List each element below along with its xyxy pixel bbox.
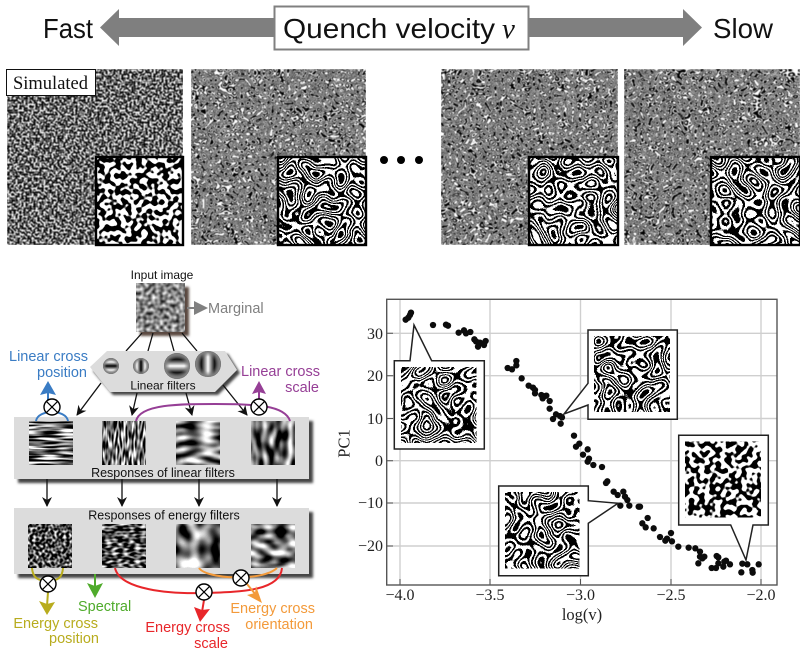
panel: responses of linear filters — [14, 417, 313, 483]
callout: slow pattern — [394, 325, 484, 449]
input image: Input image — [131, 268, 194, 282]
title symbol: ν — [502, 13, 515, 45]
x axis labels: −2.0 — [746, 587, 776, 604]
linear cross position: position — [37, 365, 87, 381]
arrows to linear responses — [77, 383, 247, 415]
pattern 3 — [441, 69, 618, 245]
marginal arrow and label: Marginal — [208, 301, 264, 317]
energy cross scale — [115, 568, 282, 652]
label: Slow: Slow — [713, 13, 774, 44]
panel: responses of energy filters — [14, 508, 313, 578]
x axis title: log(v) — [562, 605, 602, 624]
y axis labels: 0 — [375, 453, 383, 470]
energy cross orientation: Energy cross — [230, 601, 315, 617]
y axis title: PC1 — [334, 429, 354, 458]
energy cross position: Energy cross — [13, 616, 98, 632]
callout: fast pattern — [679, 435, 768, 560]
x axis labels: −3.5 — [475, 587, 505, 604]
ellipsis dots — [380, 156, 423, 164]
label: Fast: Fast — [43, 13, 93, 44]
chart: PC1 vs log(v) — [334, 299, 777, 624]
arrow: fast to slow — [100, 9, 702, 46]
energy cross orientation — [199, 568, 315, 633]
input image — [131, 268, 194, 336]
hexagon label: Linear filters — [130, 378, 196, 392]
title: Quench velocity — [283, 13, 495, 44]
linear cross position — [9, 349, 88, 421]
lines from input to filters — [126, 333, 197, 351]
filter 2 — [133, 358, 149, 374]
panel: responses of energy filters: Responses of energy filters — [88, 508, 240, 522]
y axis labels: −20 — [358, 538, 383, 555]
panel: responses of linear filters: Responses of linear filters — [91, 466, 235, 480]
plot frame and grid — [387, 299, 777, 585]
y axis labels — [358, 326, 383, 555]
panel: simulated patterns — [6, 69, 800, 245]
filter 4 — [195, 351, 221, 377]
y axis labels: −10 — [358, 495, 383, 512]
x axis labels: −3.0 — [566, 587, 595, 604]
energy cross position — [13, 568, 99, 647]
energy cross orientation: orientation — [245, 617, 313, 633]
callout: intermediate fast pattern — [499, 486, 618, 576]
energy cross scale: scale — [194, 636, 228, 652]
scatter points — [402, 309, 762, 576]
linear cross scale: scale — [285, 380, 319, 396]
y axis labels: 20 — [367, 368, 383, 385]
title box — [274, 6, 528, 50]
spectral — [78, 574, 131, 615]
filter 3 — [164, 353, 190, 379]
x axis labels — [385, 587, 776, 604]
spectral: Spectral — [78, 599, 131, 615]
velocity arrow header — [43, 6, 774, 50]
y axis labels: 10 — [367, 411, 383, 428]
energy cross scale: Energy cross — [145, 620, 230, 636]
linear cross position: Linear cross — [9, 349, 88, 365]
pattern 1 — [7, 69, 183, 245]
energy cross position: position — [49, 631, 99, 647]
pattern 2 — [191, 69, 366, 245]
x axis labels: −2.5 — [656, 587, 686, 604]
label: Simulated: Simulated — [13, 73, 88, 94]
callout: intermediate slow pattern — [564, 330, 677, 419]
filter 1 — [103, 358, 119, 374]
diagram: texture statistics model — [9, 268, 320, 652]
x axis labels: −4.0 — [385, 587, 415, 604]
linear cross scale: Linear cross — [241, 364, 320, 380]
linear cross scale — [136, 364, 320, 421]
pattern 4 — [624, 69, 800, 245]
y axis labels: 30 — [367, 326, 383, 343]
linear filters hexagon — [90, 351, 240, 395]
label: Simulated — [6, 70, 96, 96]
arrows to energy filters — [47, 479, 277, 506]
